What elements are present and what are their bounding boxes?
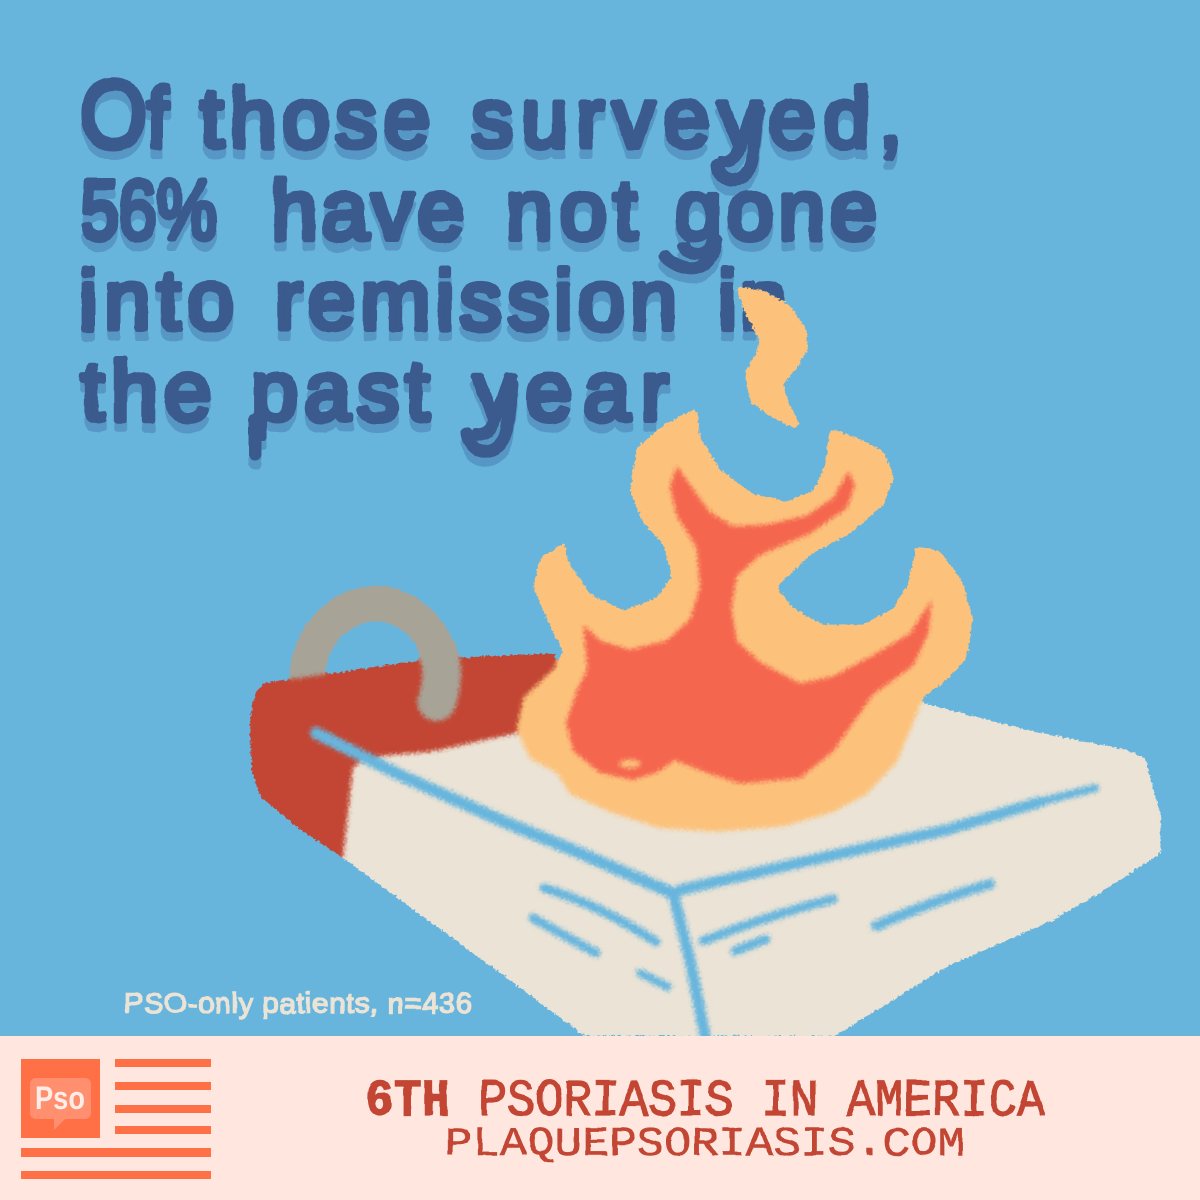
title text: the	[81, 344, 211, 438]
illustration: burning calendar	[250, 285, 1161, 1036]
title text: those	[200, 71, 430, 165]
title shadow: not	[506, 172, 637, 266]
title	[79, 61, 902, 463]
footnote: PSO-only patients, n=436	[124, 988, 472, 1020]
flame wisp	[735, 285, 808, 428]
title text: into	[79, 253, 234, 347]
title shadow: have	[271, 172, 464, 266]
flame outer	[517, 409, 973, 832]
title shadow: past	[251, 353, 429, 447]
calendar red binding	[250, 653, 560, 858]
logo: flag with speech bubble	[21, 1059, 211, 1179]
title shadow: year	[473, 353, 669, 447]
calendar cream pages	[343, 703, 1161, 1036]
footer url: PLAQUEPSORIASIS.COM	[445, 1122, 965, 1168]
title shadow	[79, 70, 902, 463]
title text: gone	[675, 163, 877, 257]
title text: remission	[275, 253, 677, 347]
title text: past	[251, 344, 429, 438]
logo: flag with speech bubble: Pso	[35, 1080, 85, 1116]
title shadow: those	[200, 80, 430, 174]
title text: have	[271, 163, 464, 257]
title shadow: surveyed,	[471, 80, 902, 174]
title shadow: gone	[675, 172, 877, 266]
title text: Of	[80, 61, 169, 168]
title shadow: the	[81, 353, 211, 447]
title shadow: remission	[275, 262, 677, 356]
calendar ring, rear	[307, 603, 442, 702]
title shadow: Of	[80, 70, 169, 177]
title text: not	[506, 163, 637, 257]
title text: in	[718, 253, 787, 347]
calendar blue edge lines	[316, 733, 1095, 1036]
calendar ring, front	[437, 653, 442, 702]
title text	[79, 61, 902, 454]
title shadow: into	[79, 262, 234, 356]
title text: 56%	[81, 163, 217, 257]
flame inner	[566, 466, 932, 784]
footer band	[0, 1036, 1200, 1200]
title text: year	[473, 344, 669, 438]
footer title: 6TH PSORIASIS IN AMERICA	[365, 1072, 1046, 1131]
title shadow: in	[718, 262, 787, 356]
title text: surveyed,	[471, 71, 902, 165]
title shadow: 56%	[81, 172, 217, 266]
